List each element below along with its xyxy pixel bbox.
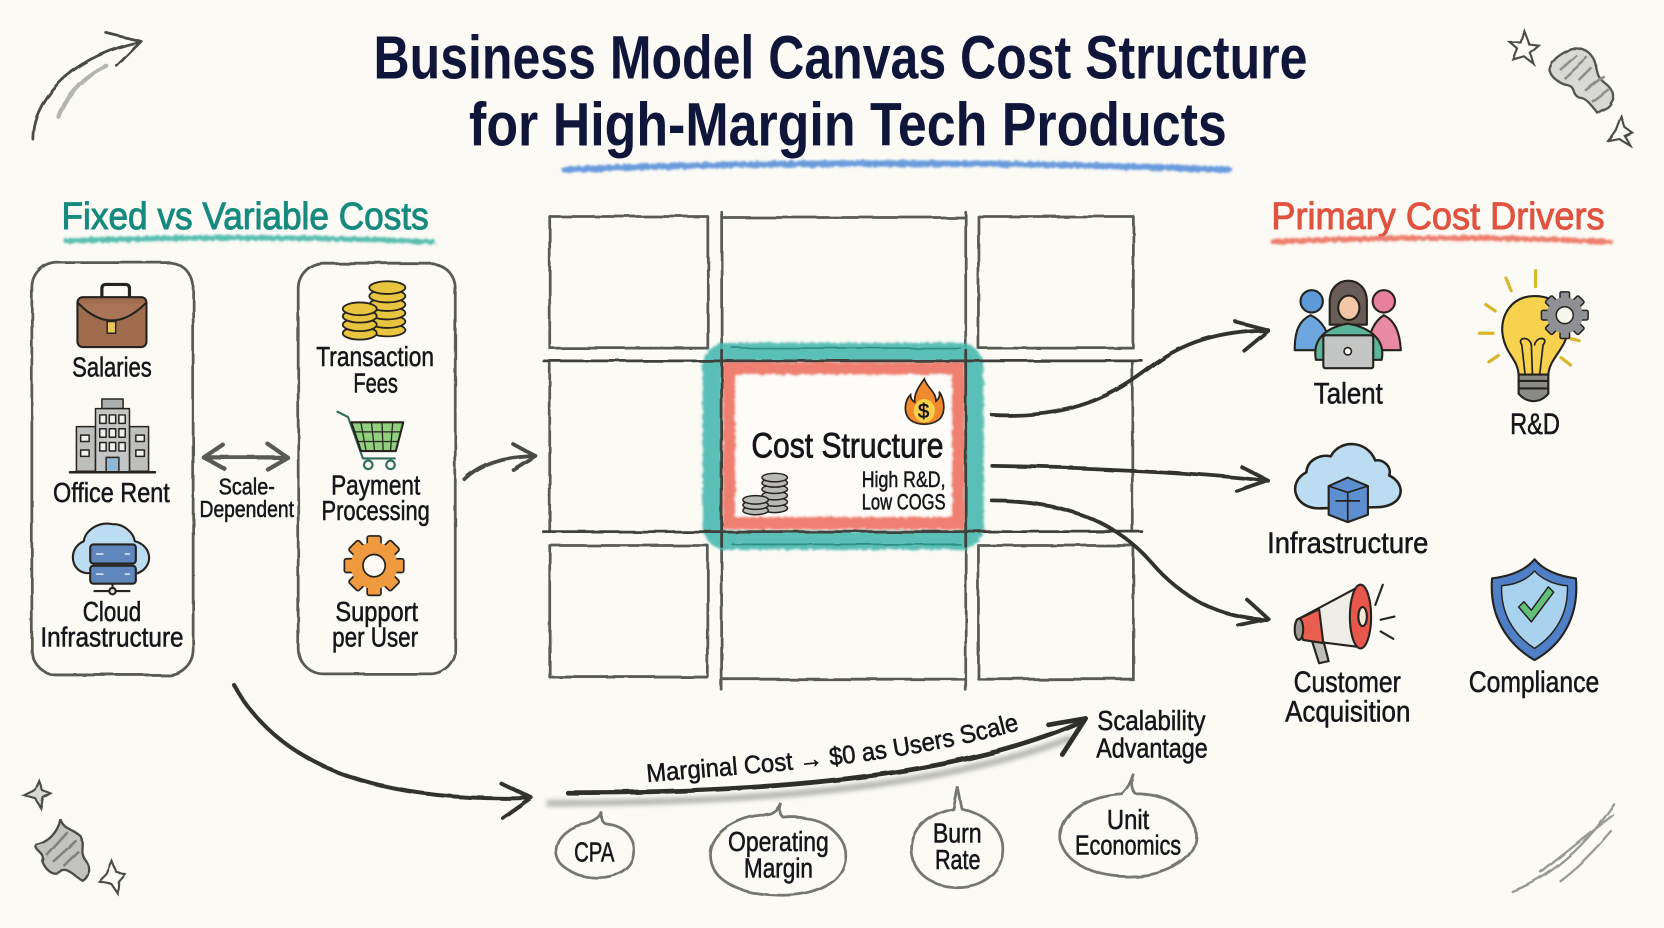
arrow shadow [547,738,1072,803]
label: payment processing: Processing [322,495,430,526]
driver: customer acquisition [1285,585,1410,729]
metric bubble: operating margin [710,803,846,896]
heading: primary cost drivers: Primary Cost Drivers [1271,195,1605,238]
arrow: costs to canvas [465,444,536,480]
label: scale-dependent [200,474,294,522]
heading: fixed vs variable costs: Fixed vs Variable Costs [62,195,429,238]
label: high r&d low cogs: Low COGS [862,489,946,514]
label: office rent: Office Rent [53,477,170,508]
icon: briefcase [77,284,146,347]
decoration: bottom-left stars and scribble [24,781,125,894]
metric bubble: operating margin: Operating [728,826,829,857]
label: transaction fees [316,341,434,399]
title underline [565,163,1229,170]
label: r&d: R&D [1510,408,1560,441]
label: transaction fees: Transaction [316,341,434,372]
label: scalability advantage: Advantage [1096,733,1208,764]
label: cloud infrastructure: Cloud [83,596,141,627]
highlight dark grid lines [543,348,1142,547]
label: customer acquisition [1285,666,1410,729]
driver: r&d [1479,271,1588,441]
metric bubble: burn rate: Rate [935,844,981,875]
label: customer acquisition: Acquisition [1285,696,1410,729]
icon: grey coins [743,473,787,515]
title: for High-Margin Tech Products [469,90,1227,159]
icon: dollar flame: $ [918,401,929,423]
variable panel frame [298,263,455,674]
label: salaries: Salaries [72,352,152,383]
arrow: costs to scalability [233,684,532,818]
label: transaction fees: Fees [353,368,398,399]
label: marginal cost: Marginal Cost → $0 as Users Scale [647,716,1018,784]
fixed vs variable underline [66,238,433,242]
icon: dollar flame [905,379,944,424]
title [374,24,1307,159]
metric bubble: unit economics: Economics [1075,829,1181,860]
label: talent: Talent [1314,377,1383,410]
icon: light bulb and gear [1479,271,1588,401]
label: scalability advantage [1096,705,1208,764]
label: high r&d low cogs: High R&D, [862,467,946,492]
icon: orange gear [344,536,404,595]
label: infrastructure: Infrastructure [1267,527,1428,560]
icon: team with laptop [1295,281,1401,368]
label: support per user: per User [332,621,418,652]
decoration: bottom-right strokes [1512,804,1614,891]
arrow: scale-dependent double arrow [204,444,288,469]
driver: infrastructure [1267,444,1428,560]
icon: shopping cart [337,412,403,469]
icon: megaphone [1295,585,1394,663]
metric bubble: unit economics: Unit [1107,804,1150,835]
highlighted cell: cost structure [543,348,1142,547]
driver: talent [1295,281,1401,410]
icon: shield with check [1492,559,1576,660]
label: payment processing: Payment [331,470,421,501]
label: customer acquisition: Customer [1294,666,1401,699]
metric bubble: burn rate [912,786,1003,887]
icon: cloud with cube [1295,444,1401,522]
label: cloud infrastructure [40,596,184,652]
panel: fixed costs [32,262,193,675]
arrow: to infrastructure [992,466,1268,491]
decoration: top-left arrow [33,33,141,139]
arrow: to customer acquisition [992,501,1268,625]
metric bubble: operating margin: Margin [744,853,813,884]
arrow: to talent [992,322,1268,415]
label: cloud infrastructure: Infrastructure [40,621,184,652]
metric bubble: unit economics [1060,774,1196,877]
metric bubble: cpa [556,812,634,878]
icon: office building [70,399,155,472]
decoration: top-right stars and scribble [1510,31,1632,145]
panel: variable costs [298,263,455,674]
arrow head [1048,718,1086,755]
arrow stroke [568,722,1082,793]
label: scale-dependent: Dependent [200,496,294,522]
icon: coin stacks [343,281,405,340]
label: support per user: Support [335,596,418,627]
arrow: marginal cost trend [547,718,1086,803]
metric bubble: burn rate: Burn [933,818,982,849]
title: Business Model Canvas Cost Structure [374,24,1307,93]
fixed panel frame [32,262,193,675]
icon: cloud servers [73,524,149,594]
label: compliance: Compliance [1469,666,1599,699]
driver: compliance [1469,559,1599,699]
label: support per user [332,596,418,652]
label: high r&d low cogs [862,467,946,514]
metric bubble: cpa: CPA [574,837,615,868]
label: cost structure: Cost Structure [751,426,943,465]
label: scale-dependent: Scale- [219,474,275,500]
panel: business model canvas grid [543,212,1142,690]
label: payment processing [322,470,430,526]
primary cost drivers underline [1273,238,1611,242]
label: scalability advantage: Scalability [1097,705,1206,736]
canvas grid lines [550,212,1133,690]
